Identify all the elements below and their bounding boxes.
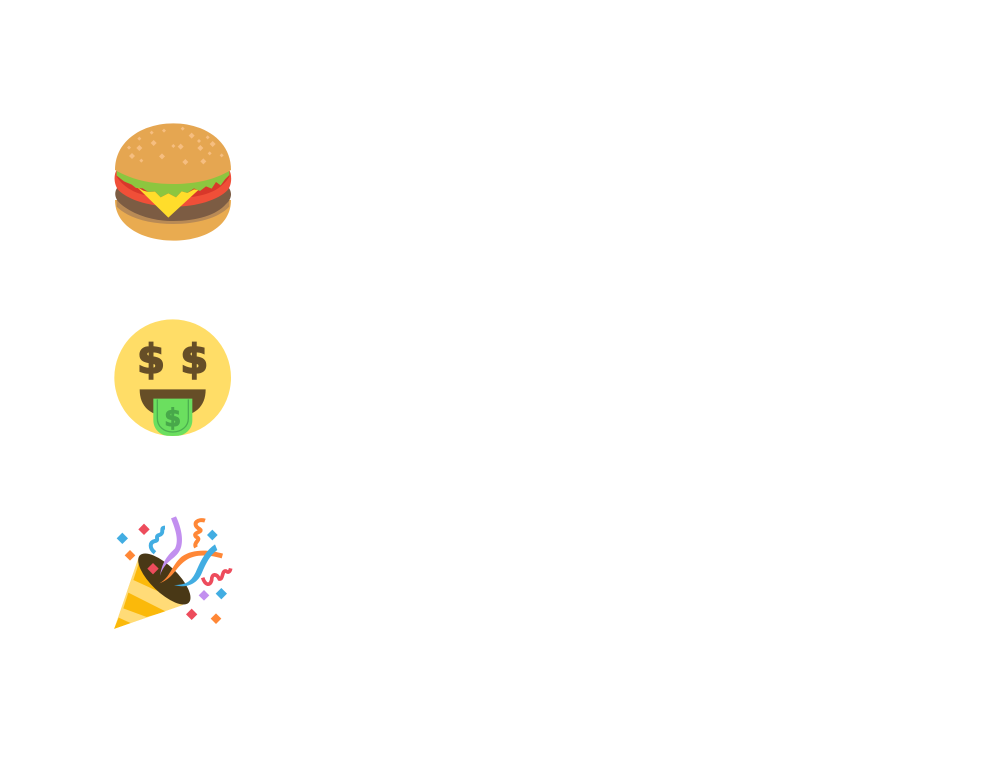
mouth	[140, 389, 206, 417]
sesame seeds	[127, 127, 224, 165]
cone mouth	[131, 546, 198, 612]
blue streamer	[174, 544, 217, 586]
orange streamer	[159, 551, 223, 583]
icon: hamburger	[115, 123, 231, 241]
right dollar eye: $	[180, 337, 208, 383]
banknote tongue: $	[164, 404, 181, 432]
confetti diamonds	[138, 524, 150, 535]
left dollar eye: $	[137, 337, 165, 383]
purple streamer	[160, 516, 182, 576]
icon: money-mouth face	[114, 319, 231, 437]
cone	[114, 555, 183, 629]
icon: party popper	[114, 516, 231, 629]
confetti curls	[151, 528, 165, 553]
